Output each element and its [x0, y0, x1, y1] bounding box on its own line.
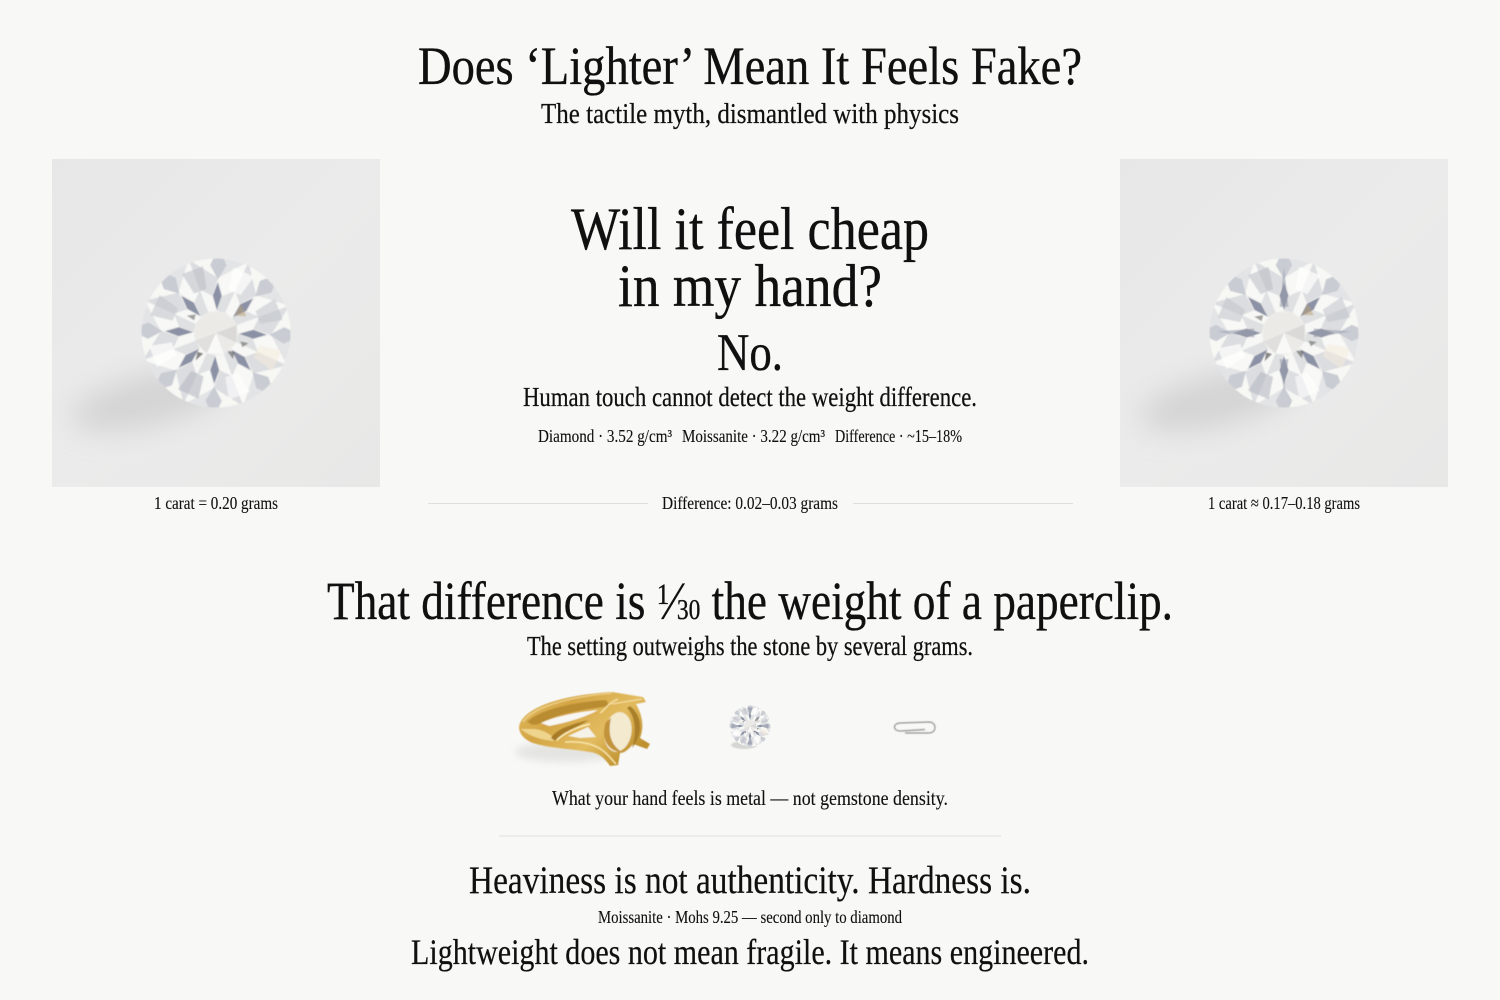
- central question: [571, 196, 929, 319]
- conclusion heading: Heaviness is not authenticity. Hardness is.: [469, 859, 1031, 902]
- density figures: Diamond · 3.52 g/cm³: [538, 426, 673, 446]
- right diamond shadow: [1142, 368, 1278, 438]
- title: Does ‘Lighter’ Mean It Feels Fake?: [418, 36, 1082, 96]
- density figures: Moissanite · 3.22 g/cm³: [682, 426, 825, 446]
- left caption: 1 carat = 0.20 grams: [154, 493, 278, 513]
- icon: left diamond: [137, 254, 295, 412]
- icon: paperclip: [894, 722, 935, 733]
- comparison objects: [515, 692, 935, 766]
- headline: paperclip comparison: ⁄: [661, 571, 685, 631]
- explanation: Human touch cannot detect the weight difference.: [523, 382, 977, 412]
- density figures: [538, 426, 962, 446]
- headline: paperclip comparison: 1: [657, 578, 669, 611]
- left diamond shadow: [74, 368, 210, 436]
- subtitle: The tactile myth, dismantled with physics: [541, 99, 959, 130]
- answer: No.: [717, 324, 783, 382]
- closing statement: Lightweight does not mean fragile. It means engineered.: [411, 932, 1089, 972]
- panel: left diamond image: [52, 159, 380, 487]
- right caption: 1 carat ≈ 0.17–0.18 grams: [1208, 493, 1360, 513]
- density figures: Difference · ~15–18%: [835, 426, 962, 446]
- panel: right diamond image: [1120, 159, 1448, 487]
- central question: Will it feel cheap: [571, 196, 929, 262]
- icon: right diamond: [1208, 257, 1360, 409]
- central question: in my hand?: [618, 253, 882, 319]
- hardness note: Moissanite · Mohs 9.25 — second only to diamond: [598, 907, 902, 927]
- difference label: Difference: 0.02–0.03 grams: [662, 493, 838, 513]
- icon: small diamond: [729, 705, 771, 749]
- headline: paperclip comparison: That difference is: [327, 571, 707, 631]
- headline: paperclip comparison: 30 the weight of a paperclip.: [677, 571, 1264, 631]
- icon: gold ring setting: [515, 692, 650, 766]
- ring caption: What your hand feels is metal — not gemstone density.: [552, 786, 948, 810]
- sub-headline: The setting outweighs the stone by several grams.: [527, 631, 973, 661]
